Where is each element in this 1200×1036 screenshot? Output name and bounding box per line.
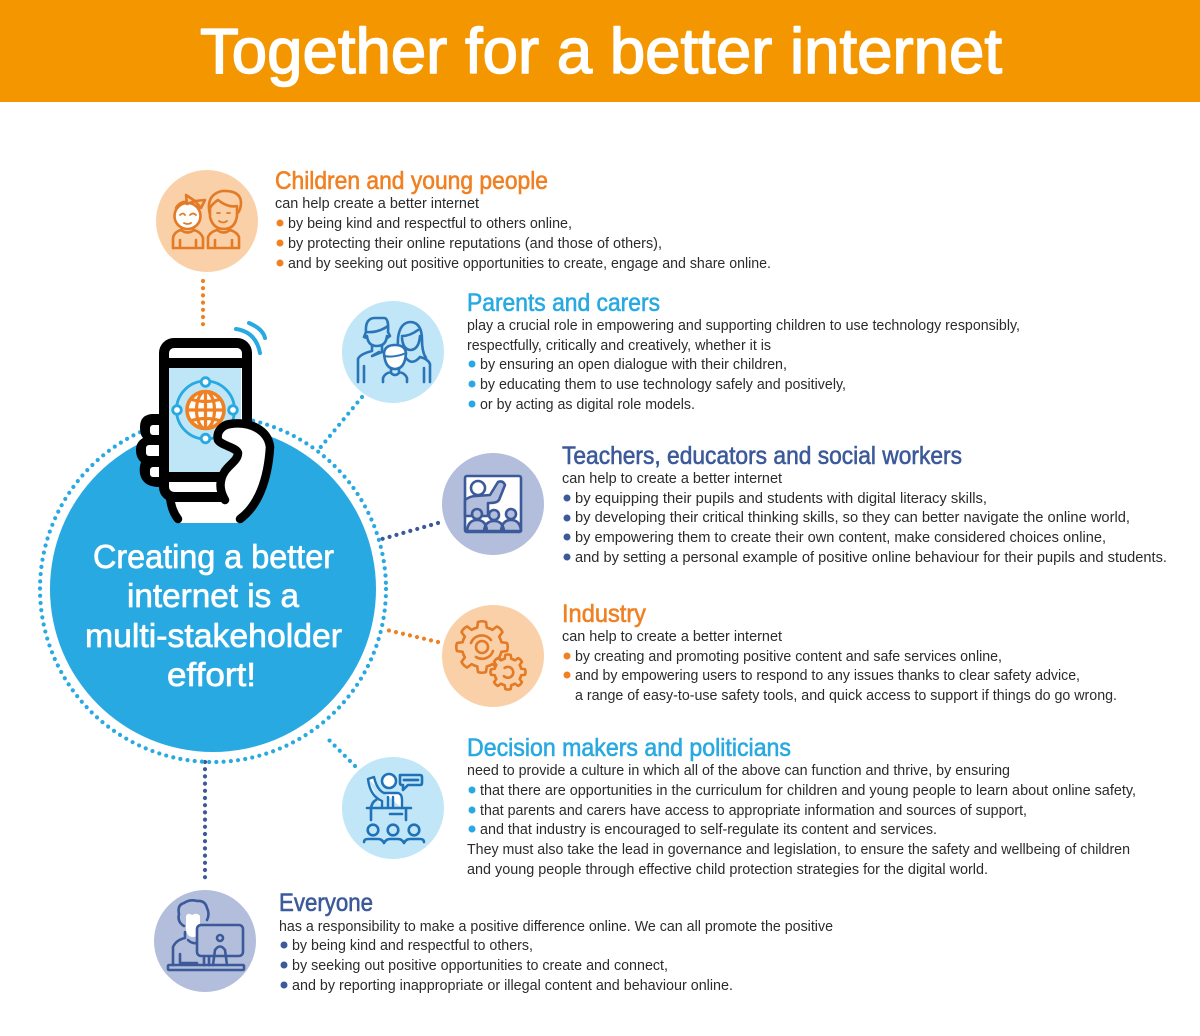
body text xyxy=(467,762,1136,878)
globe xyxy=(187,391,224,429)
panel: parents and carers xyxy=(342,289,1020,413)
connector: everyone xyxy=(203,762,207,880)
icon: classroom xyxy=(442,453,544,555)
palm fill xyxy=(172,423,270,523)
header banner xyxy=(0,0,1200,102)
heading: Everyone xyxy=(279,889,373,917)
body text: or by acting as digital role models. xyxy=(480,396,695,413)
phone bars xyxy=(164,363,247,477)
icon: hand holding phone xyxy=(136,323,270,523)
central message: effort! xyxy=(167,656,256,693)
title: Together for a better internet xyxy=(200,15,1002,87)
panel: industry xyxy=(442,600,1117,707)
central message xyxy=(85,538,342,693)
body text: and by setting a personal example of positive online behaviour for their pupils and students. xyxy=(575,549,1167,566)
body text: by protecting their online reputations (and those of others), xyxy=(288,235,662,252)
connector: decision makers xyxy=(325,736,355,766)
body text: can help to create a better internet xyxy=(562,628,783,645)
body text: and young people through effective child protection strategies for the digital world. xyxy=(467,861,988,878)
central message: multi-stakeholder xyxy=(85,617,342,654)
body text xyxy=(467,317,1020,413)
fingers xyxy=(136,414,162,487)
body text: and by seeking out positive opportunities to create, engage and share online. xyxy=(288,255,771,272)
body text: has a responsibility to make a positive difference online. We can all promote the positive xyxy=(279,918,833,935)
connector: teachers xyxy=(382,523,438,539)
body text: can help to create a better internet xyxy=(562,470,783,487)
central dotted ring xyxy=(40,416,386,762)
icon: children xyxy=(156,170,258,272)
globe ring xyxy=(173,378,237,443)
body text: need to provide a culture in which all of the above can function and thrive, by ensuring xyxy=(467,762,1010,779)
heading: Parents and carers xyxy=(467,289,660,317)
heading: Industry xyxy=(562,600,646,628)
heading: Teachers, educators and social workers xyxy=(562,442,962,470)
body text: and by empowering users to respond to any issues thanks to clear safety advice, xyxy=(575,667,1080,684)
body text: and by reporting inappropriate or illegal content and behaviour online. xyxy=(292,977,733,994)
central message: Creating a better xyxy=(93,538,334,575)
hand outline xyxy=(170,423,270,519)
central message: internet is a xyxy=(127,577,300,614)
body text: by being kind and respectful to others online, xyxy=(288,215,572,232)
body text: by equipping their pupils and students with digital literacy skills, xyxy=(575,490,987,507)
connector: industry xyxy=(387,630,438,642)
body text xyxy=(275,195,771,272)
body text: by seeking out positive opportunities to create and connect, xyxy=(292,957,668,974)
heading: Decision makers and politicians xyxy=(467,734,791,762)
wifi signal arcs xyxy=(236,323,265,353)
icon: parents xyxy=(342,301,444,403)
body text xyxy=(562,470,1167,566)
body text: respectfully, critically and creatively, whether it is xyxy=(467,337,771,354)
panel: decision makers and politicians xyxy=(342,734,1136,878)
panel: teachers, educators and social workers xyxy=(442,442,1167,566)
body text: by empowering them to create their own content, make considered choices online, xyxy=(575,529,1106,546)
panel: everyone xyxy=(154,889,833,994)
phone body xyxy=(164,343,247,497)
body text: They must also take the lead in governance and legislation, to ensure the safety and wellbeing of children xyxy=(467,841,1130,858)
body text: can help create a better internet xyxy=(275,195,480,212)
panel: children and young people xyxy=(156,167,771,272)
body text: that parents and carers have access to appropriate information and sources of support, xyxy=(480,802,1027,819)
icon: speaker and audience xyxy=(342,757,444,859)
icon: person at computer xyxy=(154,890,256,992)
body text: by ensuring an open dialogue with their children, xyxy=(480,356,787,373)
heading: Children and young people xyxy=(275,167,548,195)
body text: that there are opportunities in the curriculum for children and young people to learn about online safety, xyxy=(480,782,1136,799)
body text: and that industry is encouraged to self-regulate its content and services. xyxy=(480,821,937,838)
body text: by educating them to use technology safely and positively, xyxy=(480,376,846,393)
body text xyxy=(562,628,1117,704)
connector: parents xyxy=(320,397,362,448)
body text: by developing their critical thinking skills, so they can better navigate the online world, xyxy=(575,509,1130,526)
central circle xyxy=(50,426,376,752)
phone screen xyxy=(169,367,241,472)
connector: children xyxy=(201,281,205,330)
icon: gears xyxy=(442,605,544,707)
body text: by creating and promoting positive content and safe services online, xyxy=(575,648,1002,665)
body text: play a crucial role in empowering and supporting children to use technology responsibly, xyxy=(467,317,1020,334)
body text: by being kind and respectful to others, xyxy=(292,937,533,954)
body text: a range of easy-to-use safety tools, and quick access to support if things do go wrong. xyxy=(575,687,1117,704)
body text xyxy=(279,918,833,994)
